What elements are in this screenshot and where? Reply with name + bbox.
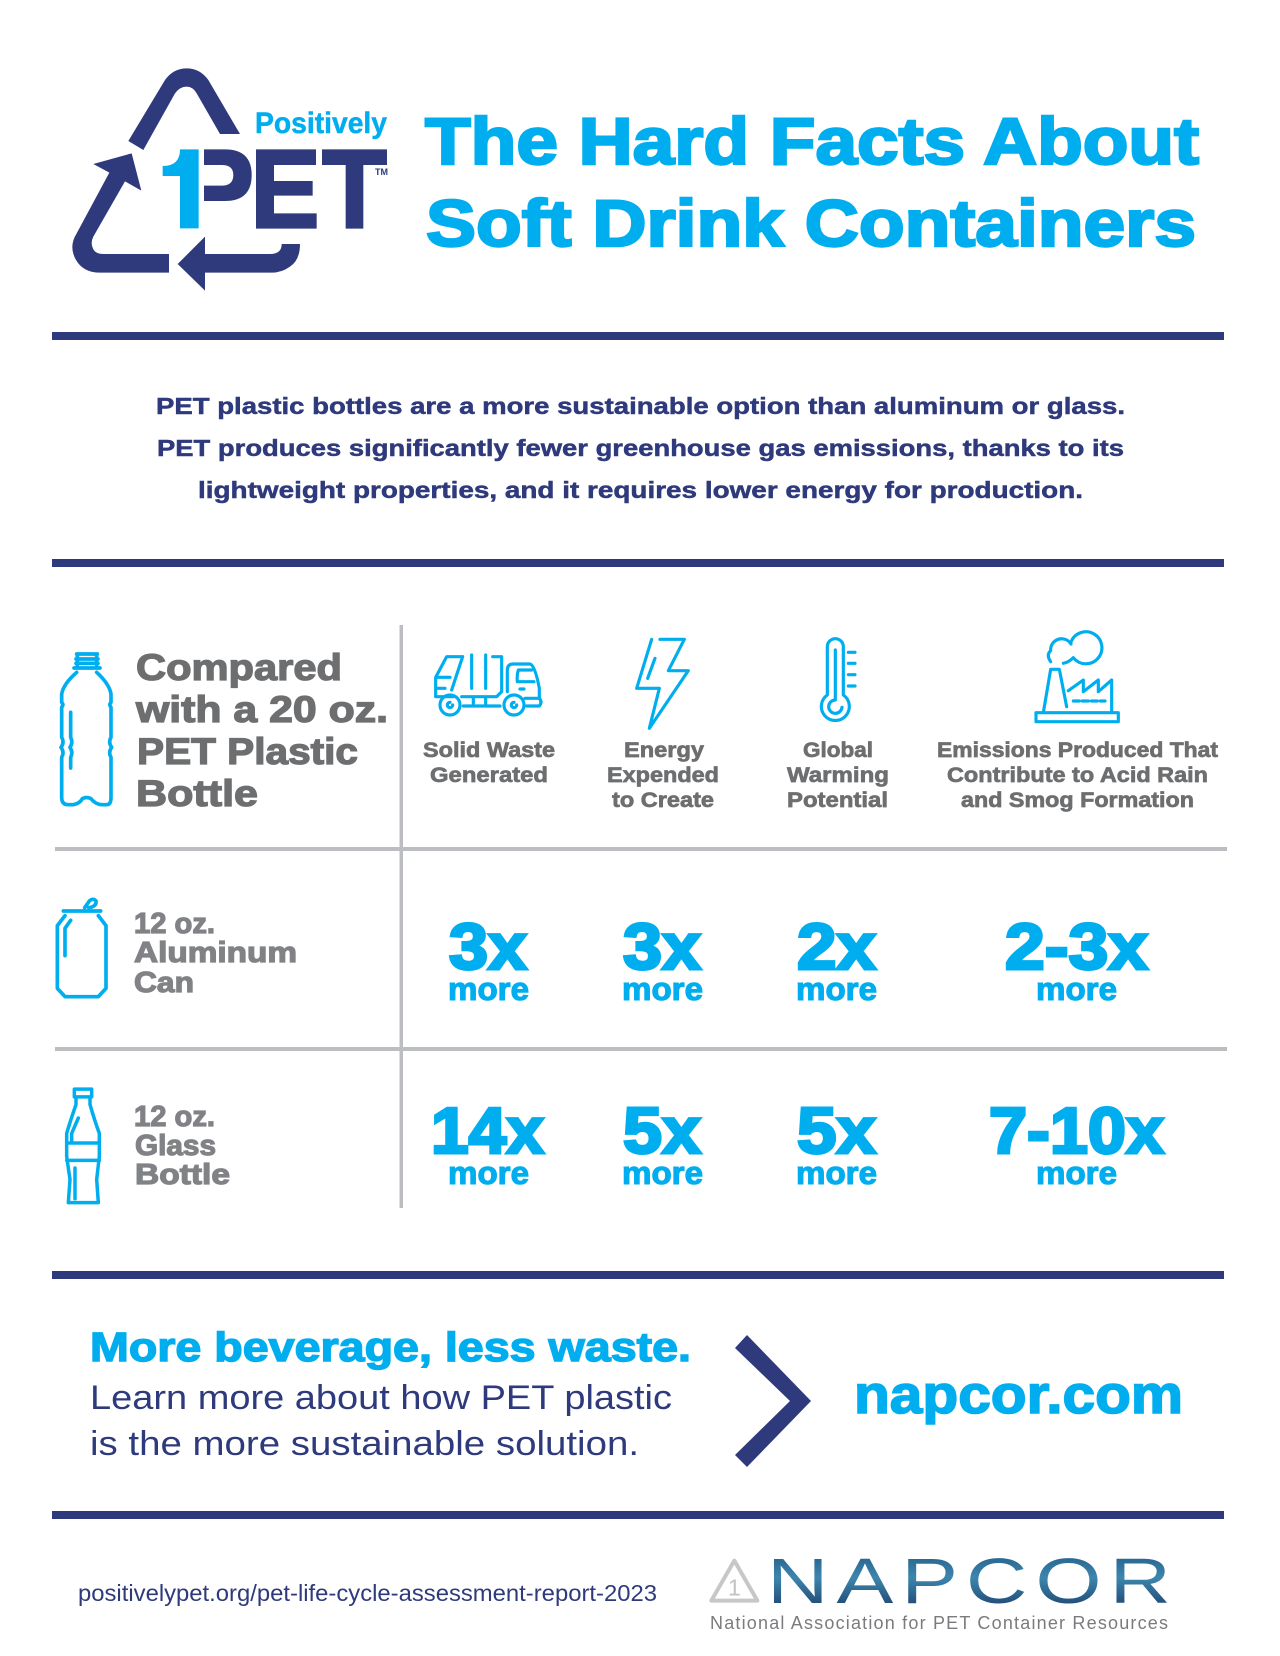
source url: positivelypet.org/pet-life-cycle-assessment-report-2023	[78, 1580, 657, 1606]
row: glass bottle	[67, 1089, 1164, 1203]
heading: compared with: Compared	[136, 647, 342, 688]
label: Contribute to Acid Rain	[947, 763, 1208, 787]
label: and Smog Formation	[961, 788, 1194, 812]
heading: compared with: Bottle	[136, 773, 258, 814]
icon: PET bottle	[61, 654, 112, 805]
icon: recycling 1 triangle	[711, 1561, 757, 1601]
text: learn more: Learn more about how PET plastic	[90, 1379, 672, 1417]
label: to Create	[612, 788, 714, 812]
values: more	[622, 1155, 703, 1191]
values: 5x	[797, 1094, 876, 1167]
text: learn more: is the more sustainable solution.	[90, 1425, 639, 1463]
icon: factory with smoke	[1036, 632, 1118, 722]
values: more	[448, 1155, 529, 1191]
tagline: National Association for PET Container Resources	[710, 1613, 1168, 1633]
column: emissions	[937, 632, 1218, 812]
icon: lightning bolt	[637, 639, 688, 728]
logo word: NAPCOR	[767, 1545, 1179, 1617]
icon: glass bottle	[67, 1089, 99, 1203]
row label: 12 oz.	[134, 1101, 215, 1133]
values: more	[1036, 1155, 1117, 1191]
icon: aluminum can	[57, 899, 106, 997]
values: 7-10x	[989, 1094, 1164, 1167]
row label	[134, 908, 297, 999]
values: 2-3x	[1005, 910, 1148, 983]
values: 14x	[431, 1094, 544, 1167]
icon: garbage truck	[436, 655, 541, 715]
intro text block: PET produces significantly fewer greenhouse gas emissions, thanks to its	[157, 435, 1124, 461]
label	[423, 738, 555, 787]
values: 3x	[449, 910, 527, 983]
column: global warming	[787, 639, 889, 812]
logo mark: 1PET letters	[163, 149, 387, 229]
heading: compared with	[135, 647, 388, 814]
icon: recycling triangle arrows	[72, 68, 300, 291]
label: Potential	[787, 788, 888, 812]
values: more	[796, 971, 877, 1007]
logo word: Positively: Positively	[255, 107, 387, 140]
icon: thermometer	[821, 639, 855, 720]
values	[431, 1094, 1164, 1191]
title	[425, 104, 1199, 260]
values: 5x	[623, 1094, 701, 1167]
label: Generated	[430, 763, 548, 787]
arrow: chevron	[735, 1335, 811, 1467]
label	[937, 738, 1218, 812]
heading: compared with: PET Plastic	[137, 731, 358, 772]
values: 3x	[623, 910, 701, 983]
column: solid waste	[423, 655, 555, 787]
label: Warming	[787, 763, 889, 787]
values	[448, 910, 1148, 1007]
values: 2x	[797, 910, 876, 983]
title: The Hard Facts About	[425, 104, 1199, 178]
label: Global	[803, 738, 873, 762]
column: energy	[607, 639, 719, 812]
row label: 12 oz.	[134, 908, 215, 940]
row label	[134, 1101, 230, 1191]
panel: comparison header	[61, 647, 388, 814]
label: Solid Waste	[423, 738, 555, 762]
logo: Positively PET	[72, 68, 388, 291]
text: learn more	[90, 1379, 672, 1463]
row: aluminum can	[57, 899, 1148, 1007]
row label: Can	[134, 967, 194, 999]
label	[787, 738, 889, 812]
row label: Bottle	[135, 1159, 230, 1191]
values: more	[1036, 971, 1117, 1007]
intro text block	[156, 393, 1125, 503]
label: Expended	[607, 763, 719, 787]
label: Energy	[624, 738, 704, 762]
row label: Glass	[135, 1130, 216, 1162]
call to action	[90, 1324, 1183, 1467]
label: Emissions Produced That	[937, 738, 1218, 762]
intro text block: PET plastic bottles are a more sustainable option than aluminum or glass.	[156, 393, 1125, 419]
title: Soft Drink Containers	[426, 186, 1196, 260]
label	[607, 738, 719, 812]
icon: recycling 1 triangle: 1	[728, 1574, 741, 1600]
values: more	[448, 971, 529, 1007]
heading: more beverage: More beverage, less waste.	[90, 1324, 691, 1370]
row label: Aluminum	[134, 937, 297, 969]
trademark: TM	[375, 167, 388, 177]
link: napcor.com: napcor.com	[854, 1365, 1183, 1425]
values: more	[622, 971, 703, 1007]
logo: NAPCOR	[710, 1545, 1179, 1633]
intro text block: lightweight properties, and it requires lower energy for production.	[198, 477, 1083, 503]
values: more	[796, 1155, 877, 1191]
heading: compared with: with a 20 oz.	[135, 689, 388, 730]
